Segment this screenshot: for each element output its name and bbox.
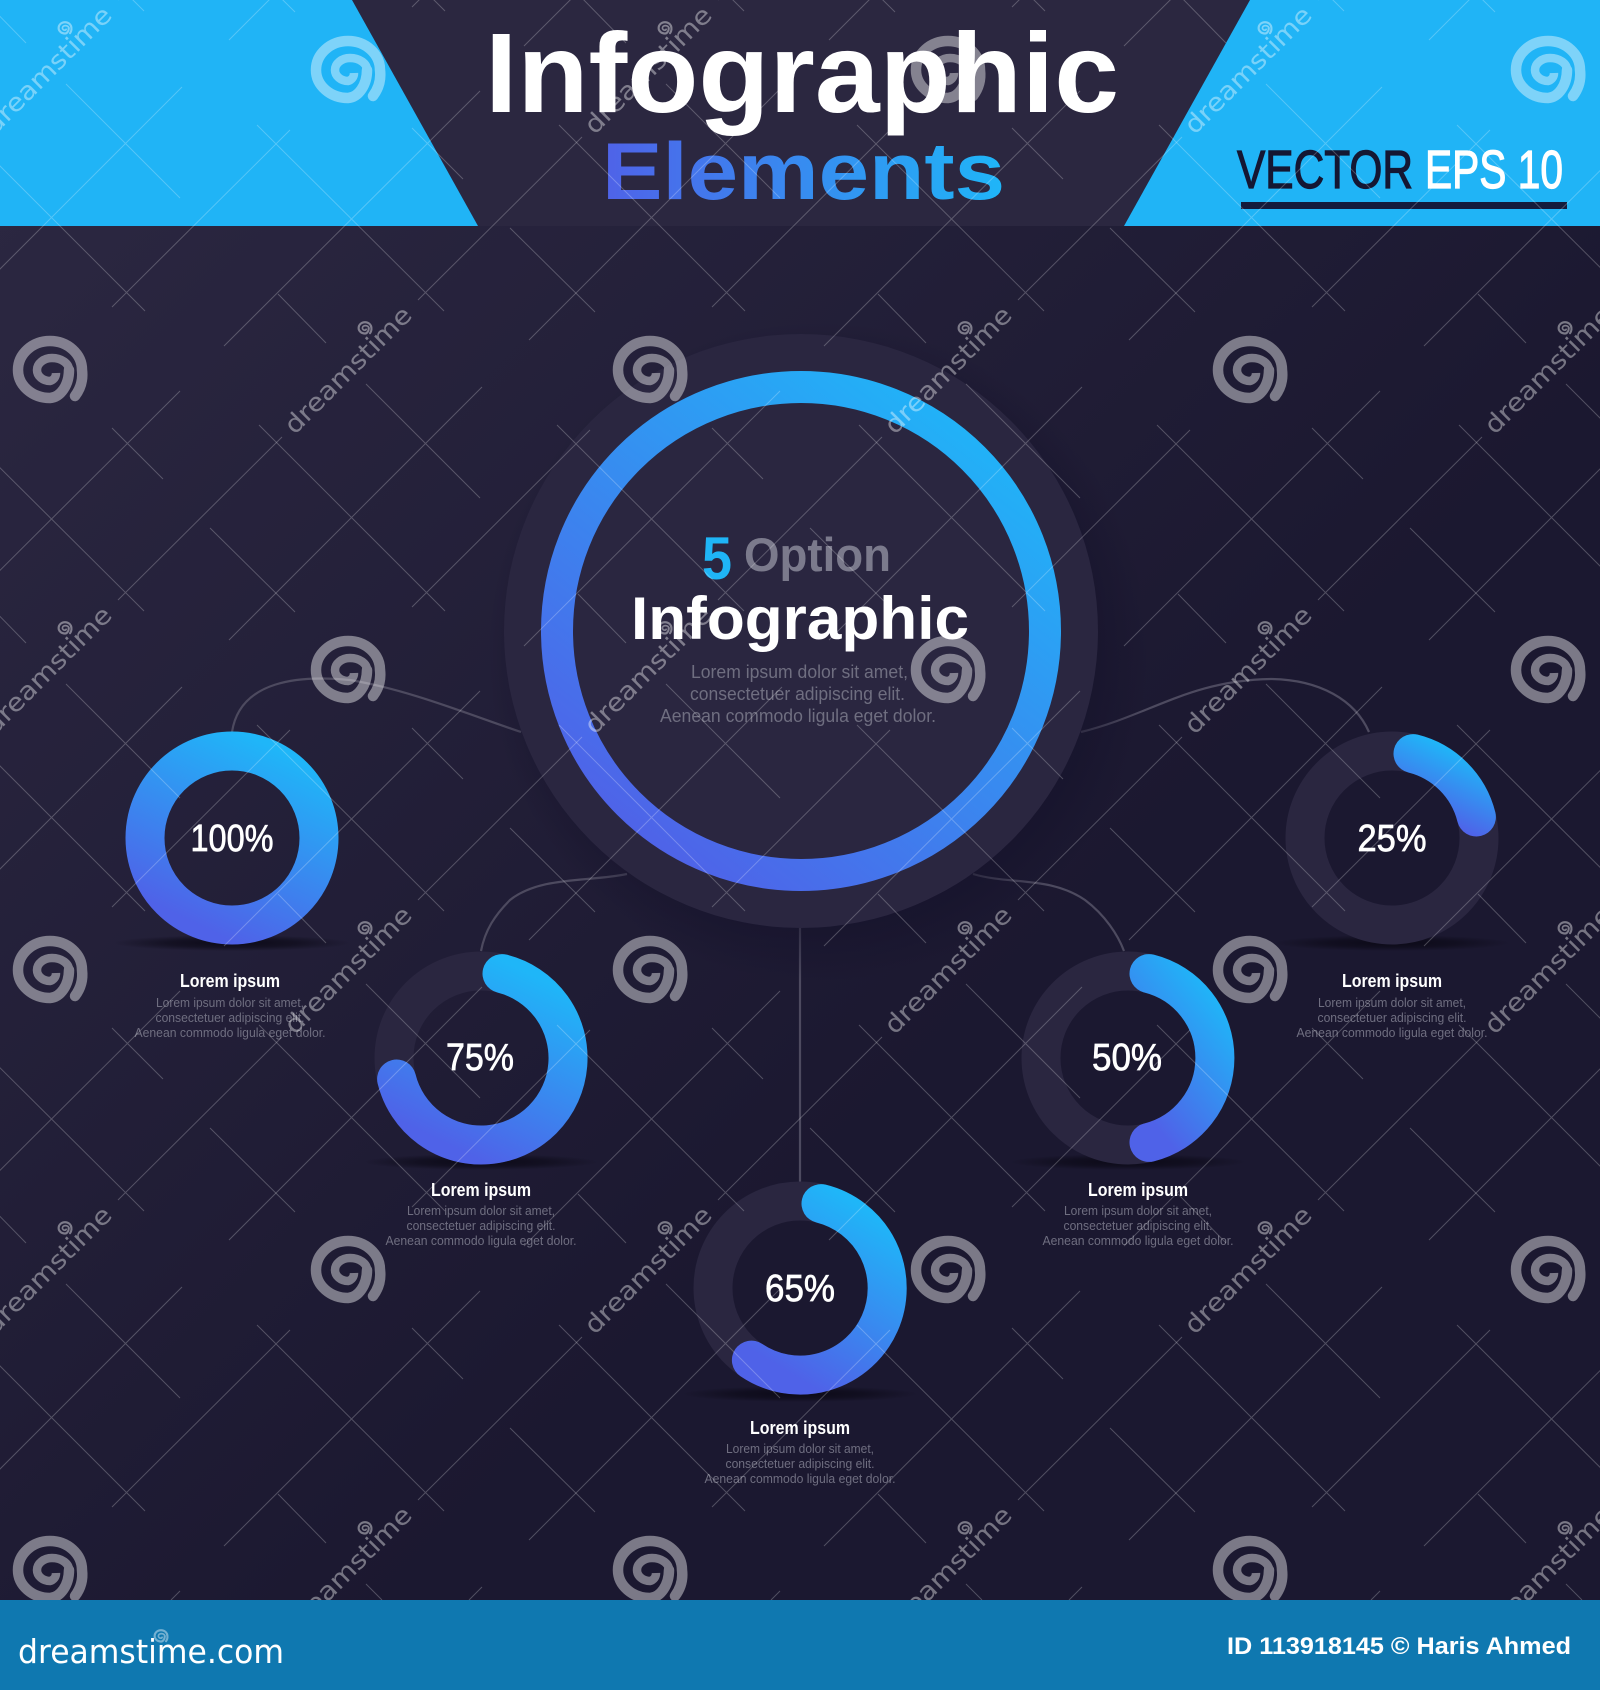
- watermark overlay: dreamstime: [578, 600, 718, 740]
- central heading: Option: [744, 528, 891, 581]
- vector badge: VECTOR: [1237, 140, 1413, 200]
- option 100%: Lorem ipsum: [180, 971, 280, 991]
- option 25%: [1274, 751, 1510, 1040]
- footer logo: dreamstime.com: [18, 1632, 284, 1671]
- title: Infographic: [485, 10, 1119, 136]
- central description: [660, 662, 936, 726]
- option 100%: [114, 751, 350, 1040]
- watermark overlay: dreamstime: [578, 0, 718, 140]
- watermark overlay: dreamstime: [1178, 1200, 1318, 1340]
- watermark overlay: dreamstime: [878, 1500, 1018, 1640]
- footer spiral mark: [155, 1630, 167, 1642]
- option 25%: consectetuer adipiscing elit.: [1318, 1010, 1466, 1025]
- vector badge: [1237, 140, 1567, 209]
- option 75%: Lorem ipsum dolor sit amet,: [407, 1203, 555, 1218]
- left blue trapezoid: [0, 0, 478, 226]
- option 50%: [1010, 971, 1246, 1248]
- option 75%: consectetuer adipiscing elit.: [406, 1218, 556, 1233]
- watermark overlay: dreamstime: [1178, 600, 1318, 740]
- option 50%: 50%: [1092, 1037, 1162, 1079]
- footer credit: ID 113918145 © Haris Ahmed: [1227, 1633, 1571, 1660]
- option 65%: 65%: [765, 1268, 835, 1310]
- option 25%: 25%: [1358, 818, 1426, 860]
- option 25%: Lorem ipsum dolor sit amet,: [1318, 995, 1466, 1010]
- option 50%: Aenean commodo ligula eget dolor.: [1042, 1233, 1234, 1248]
- option 65%: Lorem ipsum dolor sit amet,: [726, 1441, 874, 1456]
- central heading: [631, 525, 969, 652]
- header band: [0, 0, 1600, 226]
- watermark overlay: dreamstime: [878, 900, 1018, 1040]
- option 100%: consectetuer adipiscing elit.: [156, 1010, 304, 1025]
- option 25%: Lorem ipsum: [1342, 971, 1442, 991]
- central heading: Infographic: [631, 585, 969, 652]
- option 75%: Aenean commodo ligula eget dolor.: [386, 1233, 576, 1248]
- option 65%: Aenean commodo ligula eget dolor.: [704, 1471, 896, 1486]
- central description: Lorem ipsum dolor sit amet,: [691, 662, 908, 682]
- watermark overlay: dreamstime: [278, 300, 418, 440]
- option 100%: Lorem ipsum dolor sit amet,: [156, 995, 304, 1010]
- subtitle: Elements: [602, 127, 1005, 217]
- watermark overlay: dreamstime: [278, 1500, 418, 1640]
- option 65%: Lorem ipsum: [750, 1418, 850, 1438]
- footer bar: [0, 1600, 1600, 1690]
- right blue trapezoid: [1124, 0, 1600, 226]
- watermark overlay: dreamstime: [578, 1200, 718, 1340]
- option 25%: Aenean commodo ligula eget dolor.: [1296, 1025, 1488, 1040]
- option 65%: consectetuer adipiscing elit.: [726, 1456, 874, 1471]
- watermark overlay: dreamstime: [878, 300, 1018, 440]
- central circle: [488, 322, 1148, 982]
- central description: Aenean commodo ligula eget dolor.: [660, 706, 936, 726]
- option 65%: [682, 1201, 918, 1486]
- option 75%: Lorem ipsum: [431, 1180, 531, 1200]
- option 75%: 75%: [446, 1037, 514, 1079]
- option 100%: 100%: [190, 818, 274, 860]
- connectors: [232, 678, 1369, 1184]
- option 75%: [363, 971, 599, 1248]
- central description: consectetuer adipiscing elit.: [690, 684, 905, 704]
- watermark overlay: dreamstime: [1178, 0, 1318, 140]
- option 50%: Lorem ipsum dolor sit amet,: [1064, 1203, 1212, 1218]
- central heading: 5: [702, 525, 732, 592]
- watermark overlay: dreamstime: [278, 900, 418, 1040]
- option 50%: consectetuer adipiscing elit.: [1064, 1218, 1212, 1233]
- option 50%: Lorem ipsum: [1088, 1180, 1188, 1200]
- option 100%: Aenean commodo ligula eget dolor.: [134, 1025, 326, 1040]
